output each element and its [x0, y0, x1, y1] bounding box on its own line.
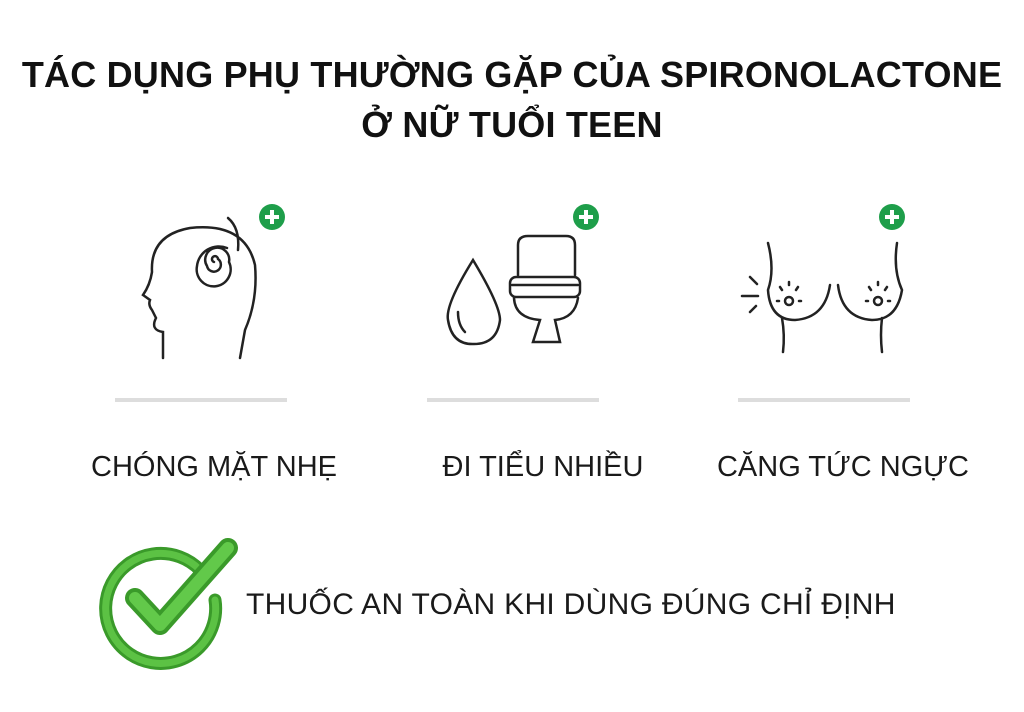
icon: plus 2 [573, 204, 599, 230]
title: Ở NỮ TUỔI TEEN [361, 104, 663, 145]
title: TÁC DỤNG PHỤ THƯỜNG GẶP CỦA SPIRONOLACTONE [22, 54, 1002, 95]
icon: green check [106, 548, 228, 663]
icon: head with spiral [143, 218, 256, 358]
label: dizziness: CHÓNG MẶT NHẸ [91, 451, 337, 483]
title [22, 54, 1002, 145]
safety statement: THUỐC AN TOÀN KHI DÙNG ĐÚNG CHỈ ĐỊNH [246, 588, 896, 621]
label: urination: ĐI TIỂU NHIỀU [443, 451, 643, 483]
icon: breasts [742, 243, 902, 352]
icon: plus 1 [259, 204, 285, 230]
label: breast tenderness: CĂNG TỨC NGỰC [717, 451, 969, 483]
icon: drop and toilet [448, 236, 580, 344]
icon: plus 3 [879, 204, 905, 230]
